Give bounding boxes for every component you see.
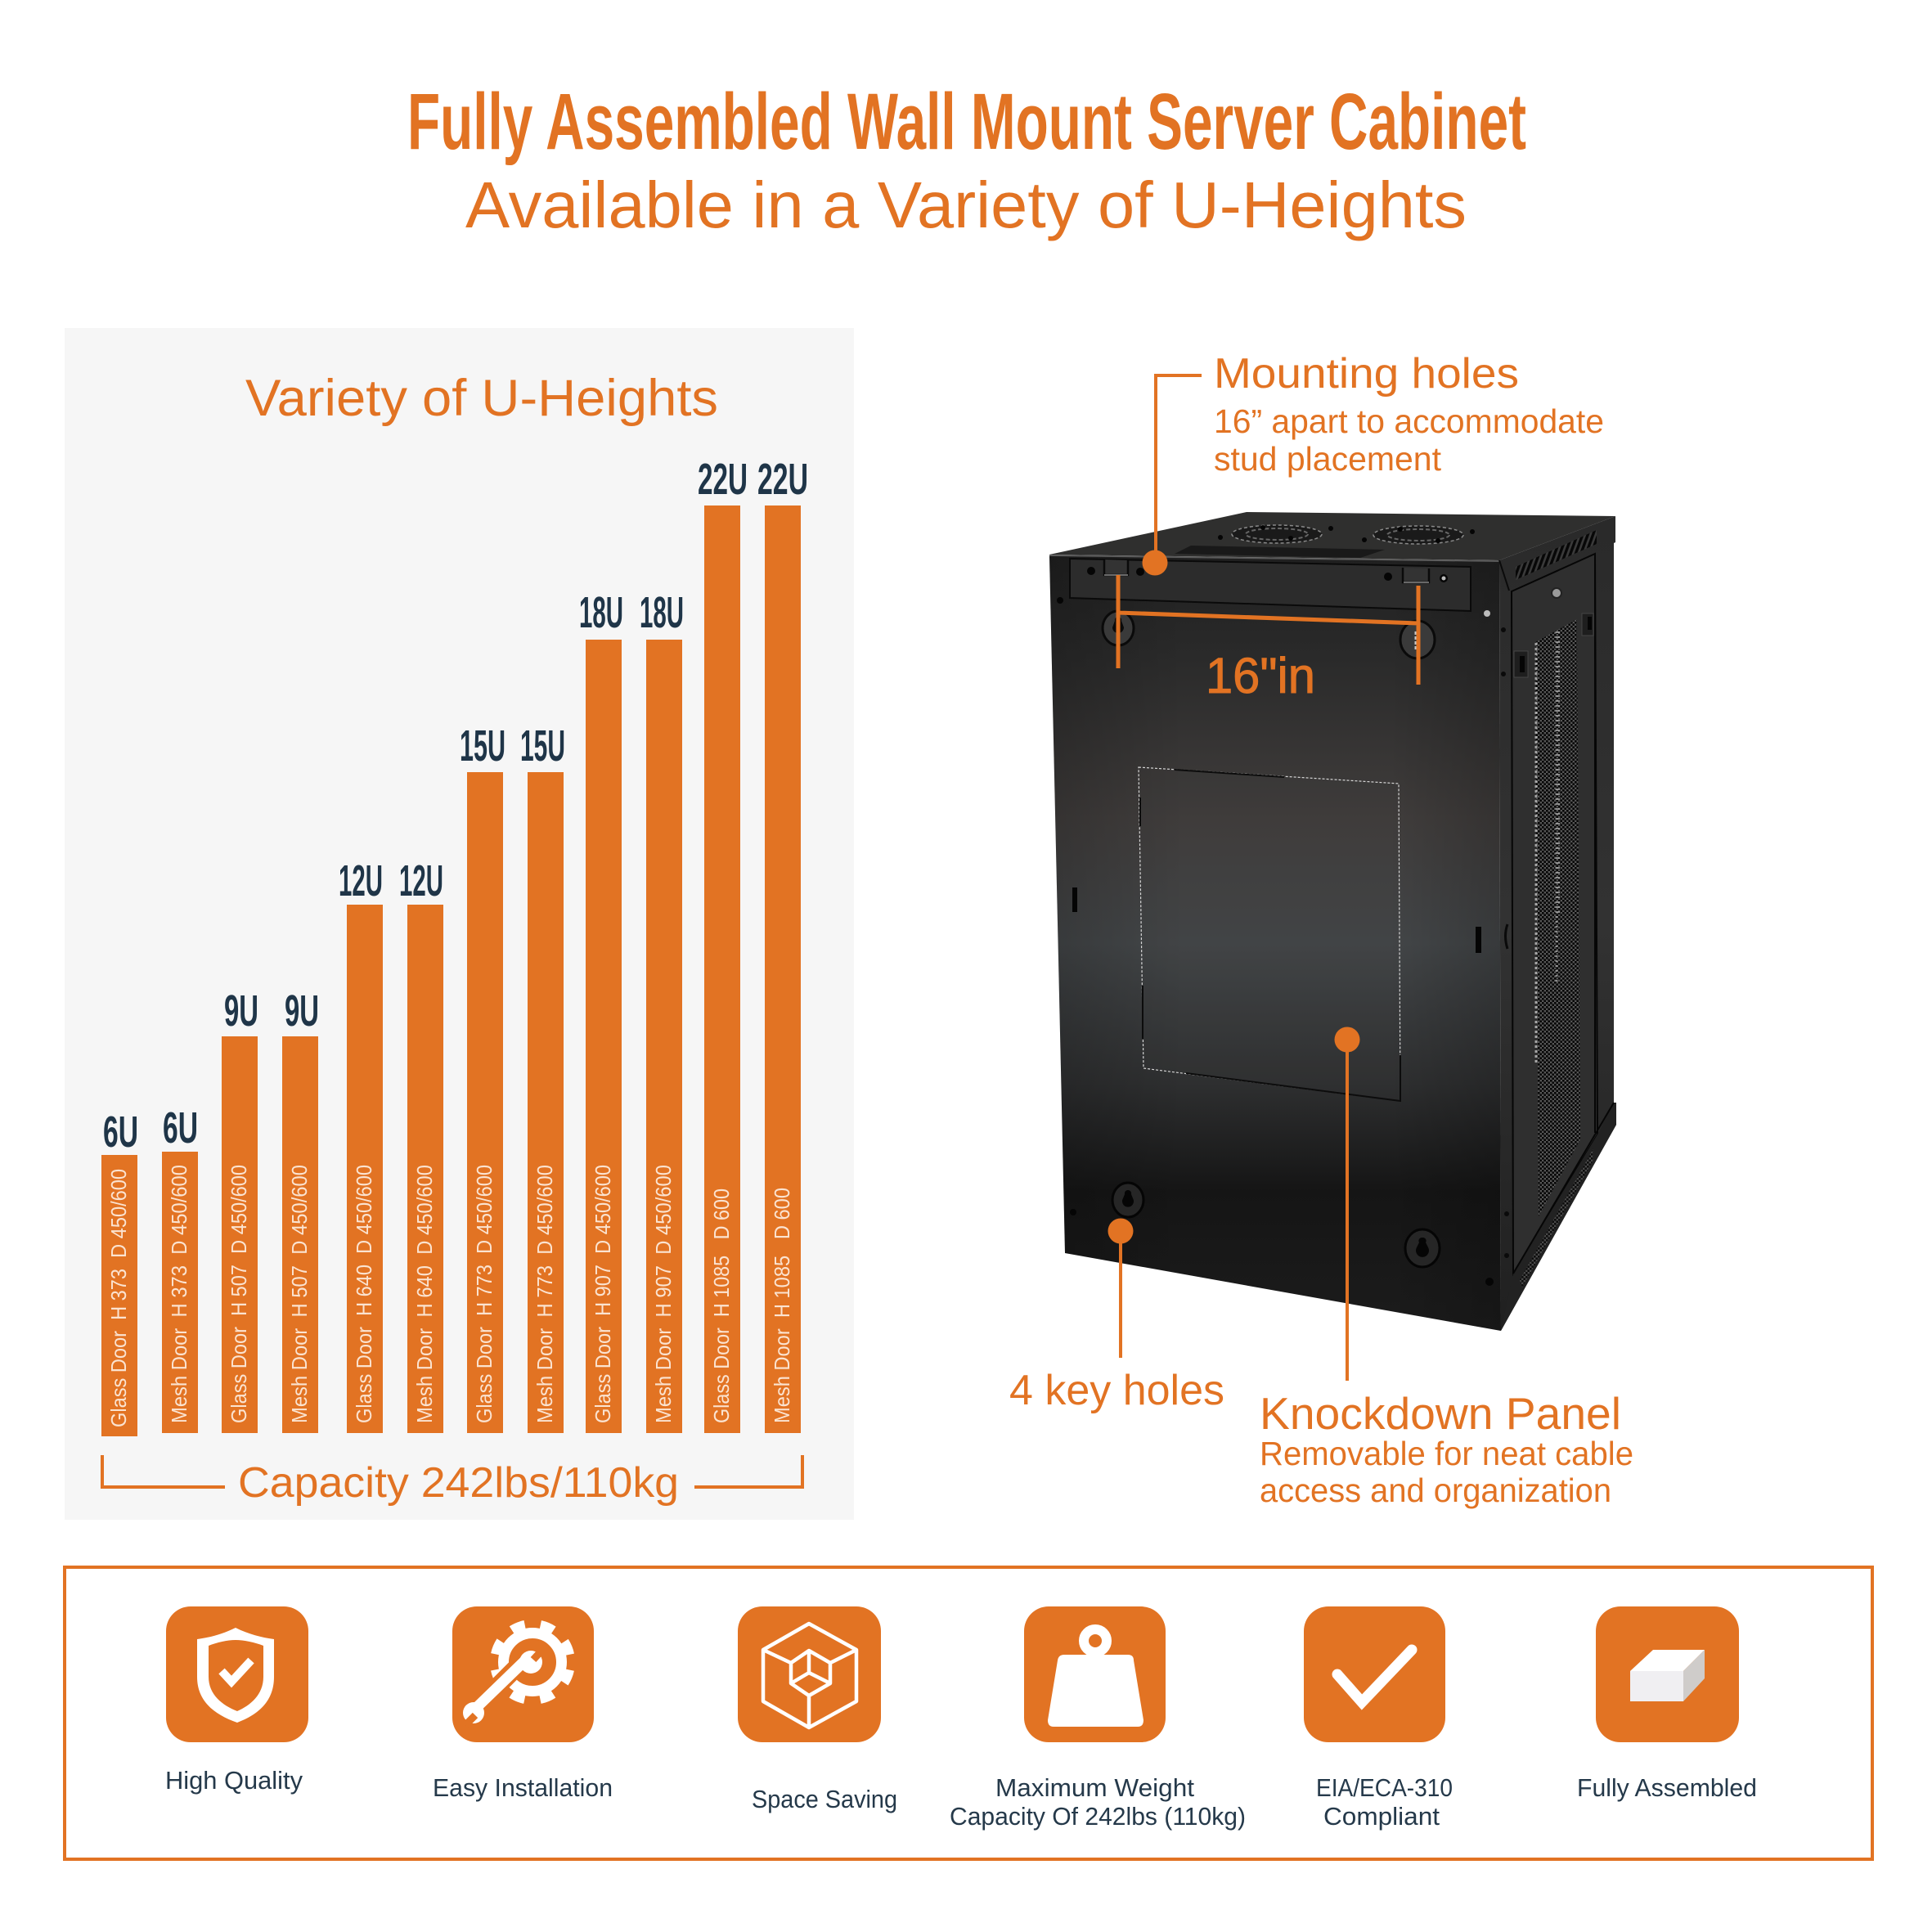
callout: knockdown panel: Removable for neat cable <box>1260 1435 1633 1472</box>
bar chart <box>101 455 808 1436</box>
panel: variety of U-heights <box>65 328 854 1520</box>
feature: maximum weight: Capacity Of 242lbs (110kg) <box>950 1802 1246 1831</box>
16 inch label: 16"in <box>1206 648 1315 703</box>
bar: 9U glass <box>222 986 258 1433</box>
feature: EIA/ECA-310 compliant: EIA/ECA-310 <box>1316 1773 1453 1802</box>
icon: gear and wrench <box>452 1606 594 1742</box>
callout: knockdown panel: Knockdown Panel <box>1260 1388 1621 1439</box>
bar: 22U mesh: Mesh Door H 1085 D 600 <box>770 1188 794 1423</box>
bar: 9U glass: Glass Door H 507 D 450/600 <box>227 1165 251 1423</box>
panel heading: Variety of U-Heights <box>245 370 718 427</box>
bar: 6U glass: 6U <box>103 1108 138 1157</box>
bar: 22U glass <box>698 455 748 1433</box>
icon: check mark <box>1304 1606 1445 1742</box>
mesh vent <box>1535 619 1580 1216</box>
bar: 12U glass: 12U <box>339 856 383 905</box>
door latches <box>1514 651 1528 677</box>
callout: knockdown panel: access and organization <box>1260 1471 1611 1509</box>
bar: 12U mesh: Mesh Door H 640 D 450/600 <box>412 1165 437 1423</box>
bar: 15U glass: 15U <box>460 721 505 771</box>
callout: mounting holes: Mounting holes <box>1214 350 1519 398</box>
callout: knockdown panel <box>1260 1027 1633 1509</box>
callout: mounting holes <box>1142 350 1604 576</box>
bar: 12U glass: Glass Door H 640 D 450/600 <box>352 1165 376 1423</box>
panel: features <box>65 1567 1872 1859</box>
bar: 9U glass: 9U <box>224 986 258 1036</box>
bar: 12U mesh: 12U <box>399 856 443 905</box>
bar: 18U mesh: 18U <box>640 588 684 637</box>
feature: EIA/ECA-310 compliant <box>1304 1606 1453 1831</box>
bar: 22U mesh: 22U <box>757 455 808 504</box>
icon: shield <box>166 1606 308 1742</box>
title line 2: Available in a Variety of U-Heights <box>465 168 1467 241</box>
feature: maximum weight: Maximum Weight <box>995 1773 1194 1802</box>
bar: 22U glass: Glass Door H 1085 D 600 <box>709 1188 734 1423</box>
bar: 15U glass: Glass Door H 773 D 450/600 <box>472 1165 496 1423</box>
bar: 15U mesh: 15U <box>520 721 565 771</box>
cabinet side with mesh door <box>1499 516 1616 1331</box>
callout: mounting holes: stud placement <box>1214 440 1442 478</box>
bar: 15U glass <box>460 721 505 1433</box>
feature: easy installation: Easy Installation <box>433 1773 613 1802</box>
bar: 9U mesh <box>282 986 319 1433</box>
bar: 18U glass: 18U <box>579 588 623 637</box>
bar: 9U mesh: 9U <box>285 986 319 1036</box>
door outline <box>1512 554 1597 1274</box>
callout: 4 key holes <box>1009 1219 1224 1414</box>
mounting rail <box>1070 559 1471 611</box>
bar: 22U glass: 22U <box>698 455 748 504</box>
feature: space saving <box>738 1606 897 1813</box>
capacity label: Capacity 242lbs/110kg <box>238 1459 679 1507</box>
knockdown panel outline <box>1139 767 1400 1101</box>
callout: 4 key holes: 4 key holes <box>1009 1367 1224 1414</box>
feature: easy installation <box>433 1606 613 1802</box>
feature: fully assembled: Fully Assembled <box>1577 1773 1757 1802</box>
feature: fully assembled <box>1577 1606 1757 1802</box>
bar: 6U glass <box>101 1108 138 1436</box>
capacity bracket <box>102 1455 802 1507</box>
feature: EIA/ECA-310 compliant: Compliant <box>1323 1802 1440 1831</box>
icon: white box <box>1596 1606 1739 1742</box>
icon: weight <box>1024 1606 1166 1742</box>
bar: 18U mesh <box>640 588 684 1433</box>
bar: 6U mesh: 6U <box>163 1103 198 1152</box>
bar: 22U mesh <box>757 455 808 1433</box>
bar: 6U glass: Glass Door H 373 D 450/600 <box>106 1169 131 1427</box>
icon: nested cube <box>738 1606 881 1742</box>
feature: space saving: Space Saving <box>752 1785 897 1813</box>
bar: 15U mesh <box>520 721 565 1433</box>
panel background <box>65 328 854 1520</box>
key holes <box>1103 611 1134 645</box>
bar: 9U mesh: Mesh Door H 507 D 450/600 <box>287 1165 312 1423</box>
callout: mounting holes: 16” apart to accommodate <box>1214 402 1604 440</box>
ventilation slots <box>1516 530 1597 580</box>
feature: high quality <box>165 1606 308 1795</box>
bar: 18U glass: Glass Door H 907 D 450/600 <box>591 1165 615 1423</box>
base vent <box>1501 1103 1616 1331</box>
bar: 15U mesh: Mesh Door H 773 D 450/600 <box>532 1165 557 1423</box>
bar: 12U mesh <box>399 856 443 1433</box>
feature: maximum weight <box>950 1606 1246 1831</box>
feature: high quality: High Quality <box>165 1766 303 1795</box>
fan vents <box>1232 525 1322 543</box>
cabinet back face <box>1049 556 1501 1331</box>
cabinet top <box>1049 512 1615 564</box>
callout: 16 inch spacing <box>1118 575 1418 703</box>
bar: 18U glass <box>579 588 623 1433</box>
bar: 6U mesh <box>162 1103 198 1433</box>
bar: 12U glass <box>339 856 383 1433</box>
server cabinet illustration <box>1049 512 1616 1331</box>
title <box>407 77 1526 241</box>
bar: 6U mesh: Mesh Door H 373 D 450/600 <box>167 1165 191 1423</box>
bar: 18U mesh: Mesh Door H 907 D 450/600 <box>651 1165 676 1423</box>
